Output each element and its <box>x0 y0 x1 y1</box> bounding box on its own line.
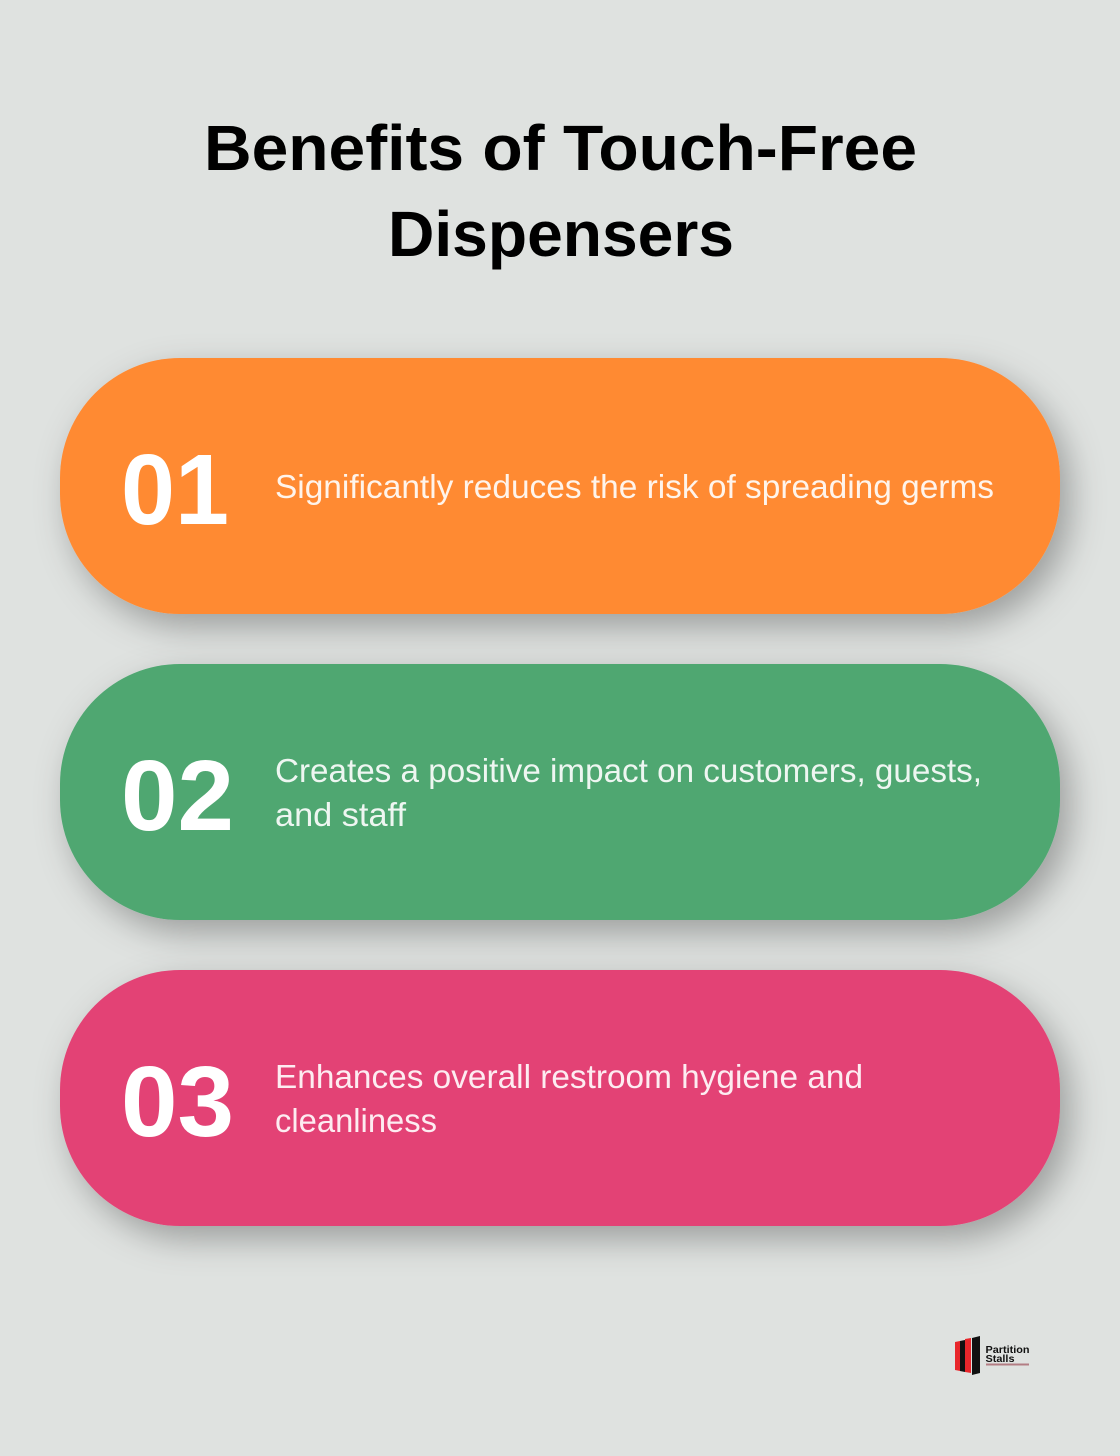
panel: benefit 01 <box>60 358 1060 614</box>
text: benefit 03 <box>275 1058 863 1139</box>
text: benefit 03: cleanliness <box>275 1102 437 1139</box>
title <box>204 112 917 270</box>
pill: orange <box>60 358 1060 614</box>
logo: Partition Stalls <box>955 1336 1030 1375</box>
pill: pink <box>60 970 1060 1226</box>
text: benefit 02 <box>275 752 982 833</box>
logo wordmark: Partition <box>986 1344 1030 1356</box>
panel: benefit 02 <box>60 664 1060 920</box>
pill: green <box>60 664 1060 920</box>
number 02: 02 <box>121 740 234 852</box>
title: Dispensers <box>388 198 734 270</box>
logo tagline <box>986 1364 1029 1366</box>
number 03: 03 <box>121 1046 234 1158</box>
logo wordmark: Stalls <box>986 1353 1015 1365</box>
text: benefit 02: Creates a positive impact on customers, guests, <box>275 752 982 789</box>
title: Benefits of Touch-Free <box>204 112 917 184</box>
icon: partition bars <box>955 1336 980 1375</box>
text: benefit 01: Significantly reduces the risk of spreading germs <box>275 468 994 505</box>
panel: benefit 03 <box>60 970 1060 1226</box>
number 01: 01 <box>121 434 229 546</box>
logo wordmark <box>986 1344 1030 1365</box>
text: benefit 03: Enhances overall restroom hygiene and <box>275 1058 863 1095</box>
text: benefit 02: and staff <box>275 796 407 833</box>
